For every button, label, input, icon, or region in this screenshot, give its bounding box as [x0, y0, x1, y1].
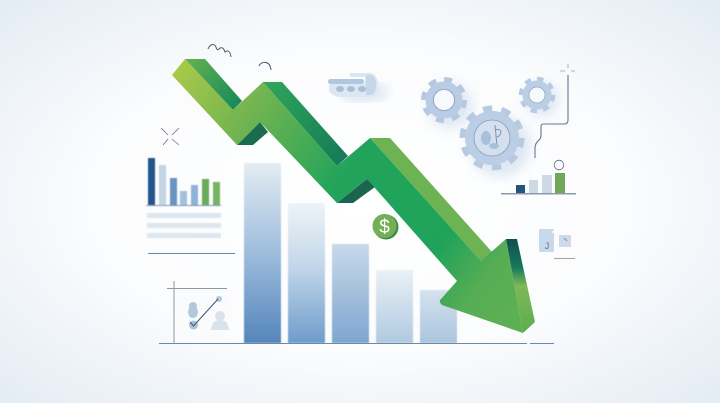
underside fold two: [337, 179, 375, 203]
icon: document tiles: J: [545, 241, 549, 251]
gear shadows: [428, 84, 558, 176]
icon: dollar coin: $: [379, 217, 390, 238]
icon: squiggle marks: [208, 45, 271, 70]
icon: gears: [424, 79, 558, 176]
gear: small right: [521, 79, 553, 111]
light top strip of third segment: [370, 138, 492, 261]
gear: large centre: [463, 109, 521, 167]
mini bar chart: left: [146, 158, 221, 206]
icon: document tiles: [539, 229, 575, 259]
icon: people check chart: [167, 281, 229, 343]
chart baseline: [159, 342, 554, 344]
underside fold one: [237, 122, 268, 145]
mini bar chart: right: [501, 160, 576, 194]
icon: dollar coin: [372, 214, 398, 240]
arrow front face: [172, 59, 523, 333]
back face of first segment: [185, 59, 242, 110]
icon: circuit line: [535, 64, 575, 158]
icon: pill device: [328, 73, 388, 101]
text placeholder lines: left: [147, 213, 221, 238]
arrow: green downward trend: [172, 59, 535, 333]
arrow head side: [506, 239, 535, 333]
bar chart: declining bars: [244, 163, 457, 343]
divider line: left: [148, 253, 235, 254]
back face of second segment: [263, 82, 348, 166]
gear: left: [424, 80, 464, 120]
icon: sparkle cross: [161, 128, 179, 145]
